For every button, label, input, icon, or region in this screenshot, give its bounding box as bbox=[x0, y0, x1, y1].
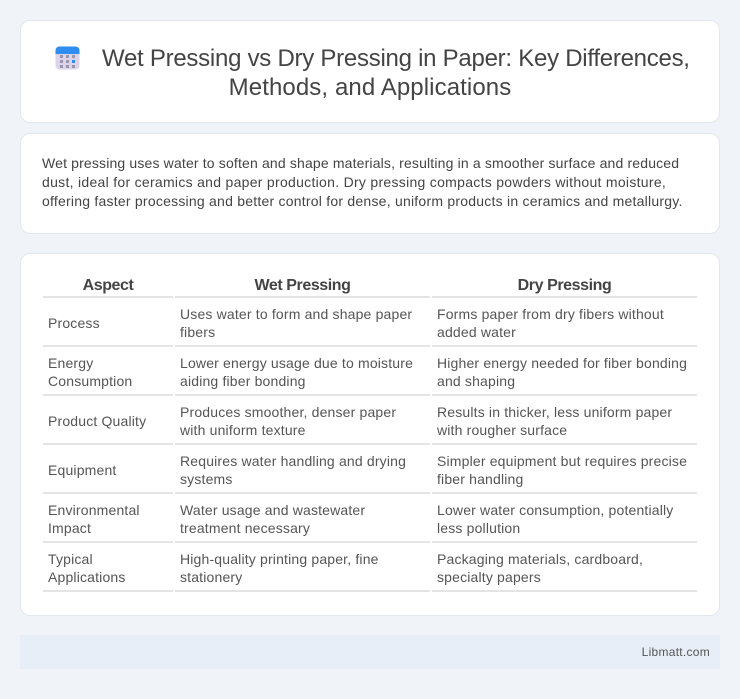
intro text bbox=[42, 155, 683, 209]
environmental wet: treatment necessary bbox=[180, 520, 310, 536]
row: energy consumption: Consumption bbox=[48, 373, 132, 389]
environmental dry: less pollution bbox=[437, 520, 520, 536]
process dry: Forms paper from dry fibers without bbox=[437, 306, 664, 322]
row: typical applications bbox=[48, 551, 126, 585]
intro text: dust, ideal for ceramics and paper production. Dry pressing compacts powders without moisture, bbox=[42, 174, 666, 190]
equipment wet bbox=[180, 453, 406, 487]
applications wet: High-quality printing paper, fine bbox=[180, 551, 379, 567]
footer text: Libmatt.com: Libmatt.com bbox=[642, 645, 710, 659]
title bbox=[102, 45, 690, 101]
row: equipment: Equipment bbox=[48, 462, 116, 478]
energy dry: Higher energy needed for fiber bonding bbox=[437, 355, 687, 371]
row: process: Process bbox=[48, 315, 100, 331]
process dry: added water bbox=[437, 324, 516, 340]
environmental wet bbox=[180, 502, 365, 536]
energy wet: Lower energy usage due to moisture bbox=[180, 355, 413, 371]
row: environmental impact: Impact bbox=[48, 520, 91, 536]
intro text: Wet pressing uses water to soften and shape materials, resulting in a smoother surface and reduced bbox=[42, 155, 679, 171]
title: Wet Pressing vs Dry Pressing in Paper: Key Differences, bbox=[102, 45, 690, 72]
equipment wet: systems bbox=[180, 471, 233, 487]
table header: wet pressing: Wet Pressing bbox=[254, 277, 351, 294]
header panel bbox=[20, 20, 720, 123]
applications dry bbox=[437, 551, 643, 585]
applications wet bbox=[180, 551, 379, 585]
applications dry: specialty papers bbox=[437, 569, 541, 585]
process wet: Uses water to form and shape paper bbox=[180, 306, 412, 322]
applications dry: Packaging materials, cardboard, bbox=[437, 551, 643, 567]
row: product quality: Product Quality bbox=[48, 413, 146, 429]
panel: introduction bbox=[20, 133, 720, 234]
process wet: fibers bbox=[180, 324, 215, 340]
environmental dry bbox=[437, 502, 674, 536]
intro text: offering faster processing and better control for dense, uniform products in ceramics and metallurgy. bbox=[42, 193, 683, 209]
environmental dry: Lower water consumption, potentially bbox=[437, 502, 673, 518]
process dry bbox=[437, 306, 664, 340]
equipment dry: Simpler equipment but requires precise bbox=[437, 453, 687, 469]
energy wet: aiding fiber bonding bbox=[180, 373, 306, 389]
row: environmental impact bbox=[48, 502, 140, 536]
icon: calendar grid bbox=[56, 46, 80, 70]
row: energy consumption: Energy bbox=[48, 355, 93, 371]
equipment dry bbox=[437, 453, 687, 487]
row: typical applications: Applications bbox=[48, 569, 126, 585]
energy dry bbox=[437, 355, 687, 389]
quality dry bbox=[437, 404, 672, 438]
equipment dry: fiber handling bbox=[437, 471, 523, 487]
row: energy consumption bbox=[48, 355, 132, 389]
equipment wet: Requires water handling and drying bbox=[180, 453, 406, 469]
quality wet: with uniform texture bbox=[180, 422, 306, 438]
quality dry: Results in thicker, less uniform paper bbox=[437, 404, 672, 420]
environmental wet: Water usage and wastewater bbox=[180, 502, 365, 518]
applications wet: stationery bbox=[180, 569, 242, 585]
quality wet bbox=[180, 404, 396, 438]
energy wet bbox=[180, 355, 413, 389]
energy dry: and shaping bbox=[437, 373, 515, 389]
row: typical applications: Typical bbox=[48, 551, 93, 567]
row: environmental impact: Environmental bbox=[48, 502, 140, 518]
table header: dry pressing: Dry Pressing bbox=[518, 277, 611, 294]
table header: aspect: Aspect bbox=[83, 277, 133, 294]
title: Methods, and Applications bbox=[229, 74, 511, 101]
quality dry: with rougher surface bbox=[437, 422, 567, 438]
panel: comparison table bbox=[20, 253, 720, 616]
quality wet: Produces smoother, denser paper bbox=[180, 404, 396, 420]
footer bar bbox=[20, 635, 720, 669]
process wet bbox=[180, 306, 412, 340]
